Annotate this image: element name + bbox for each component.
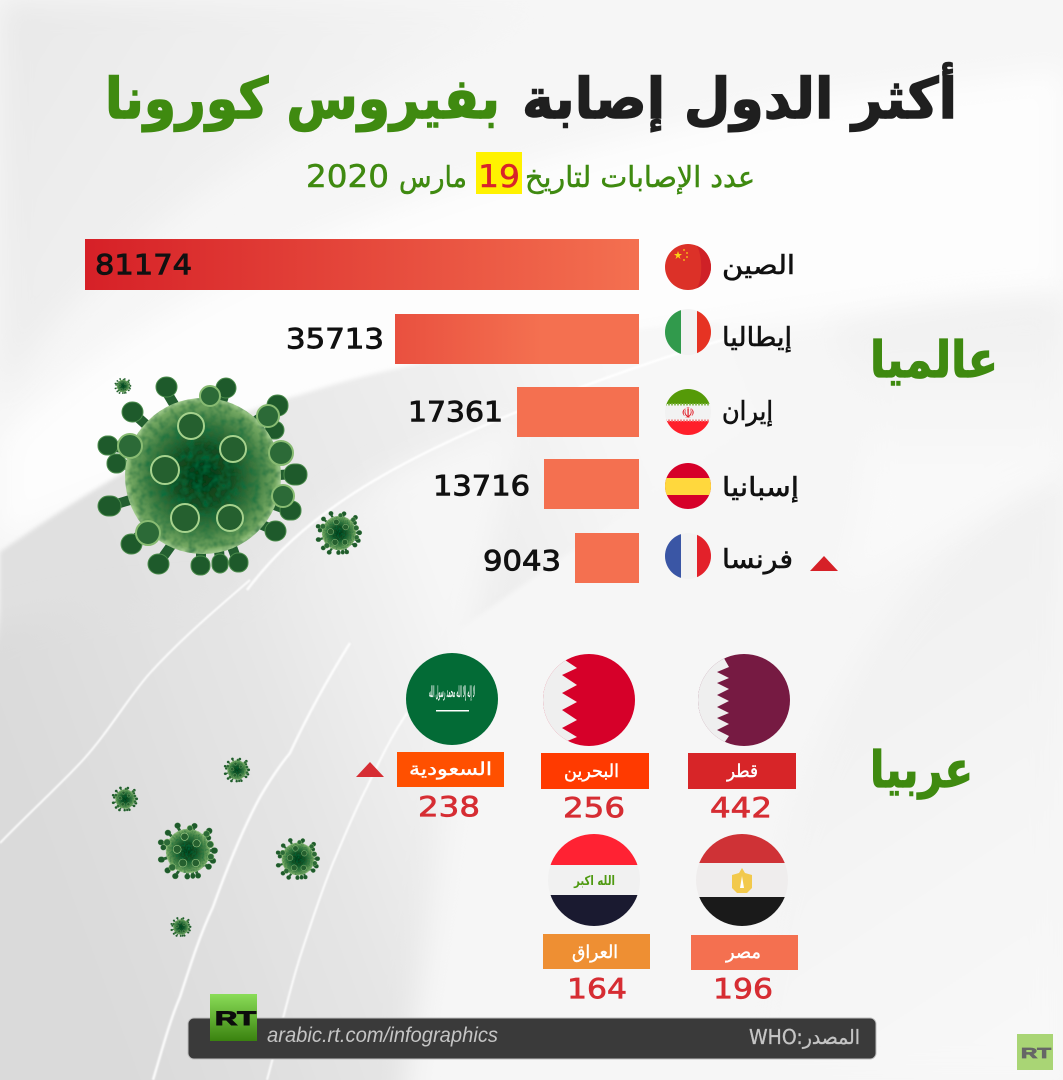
bar: Italy	[286, 314, 639, 364]
country names: global: فرنسا	[722, 545, 793, 575]
marker: France	[810, 556, 838, 571]
virus large	[98, 377, 307, 575]
virus small 1	[115, 378, 131, 394]
bar: Iran	[408, 387, 639, 437]
subtitle: 2020	[306, 159, 389, 195]
bar: China: 81174	[95, 248, 192, 281]
footer bar: WHO:المصدر	[749, 1025, 860, 1049]
virus small 4	[112, 787, 138, 811]
bar: Spain	[433, 459, 639, 509]
logo: RT: RT	[215, 1009, 257, 1030]
section label: global: عالميا	[870, 331, 998, 389]
infographic: لا إله إلا الله محمد رسول الله	[429, 683, 475, 701]
subtitle	[306, 152, 755, 195]
flag: Italy	[665, 309, 712, 355]
flag: Spain	[665, 463, 711, 509]
logo: RT watermark: RT	[1021, 1045, 1051, 1062]
card: Qatar	[688, 654, 796, 824]
virus small 2	[316, 511, 362, 555]
title: بفيروس كورونا	[105, 67, 500, 132]
subtitle: عدد الإصابات لتاريخ	[525, 160, 755, 195]
country names: global: إيطاليا	[722, 323, 792, 353]
card: Qatar: 442	[710, 791, 772, 824]
country names: global: إيران	[722, 397, 773, 427]
card: Bahrain: 256	[563, 791, 625, 824]
subtitle: مارس	[399, 160, 467, 194]
flag: Iran	[665, 389, 711, 435]
logo: RT watermark	[1017, 1034, 1053, 1070]
flag: Iran: ☫	[681, 404, 695, 422]
bar chart: global	[85, 239, 639, 583]
footer bar	[188, 1018, 876, 1059]
virus small 3	[224, 758, 250, 782]
subtitle: 19	[478, 159, 520, 195]
country names: global	[722, 251, 799, 575]
bar: Italy: 35713	[286, 322, 384, 355]
card: Egypt: 196	[713, 972, 773, 1005]
title	[105, 62, 957, 132]
title: أكثر الدول إصابة	[522, 62, 957, 132]
card: Egypt	[691, 834, 798, 1005]
virus small 7	[170, 917, 191, 937]
bar: Iran: 17361	[408, 395, 503, 428]
country names: global: إسبانيا	[722, 473, 799, 503]
card: Bahrain	[541, 654, 649, 824]
footer bar: arabic.rt.com/infographics	[267, 1024, 498, 1047]
card: Saudi Arabia	[397, 653, 504, 823]
flag: China	[665, 244, 711, 290]
country names: global: الصين	[722, 251, 795, 281]
card: Egypt: مصر	[725, 942, 761, 963]
flag: France	[665, 533, 712, 579]
bar: France: 9043	[483, 544, 561, 577]
card: Qatar: قطر	[726, 761, 758, 782]
card: Saudi Arabia: 238	[418, 790, 480, 823]
card: Iraq: العراق	[572, 942, 618, 963]
virus small 5	[158, 823, 218, 879]
card: Iraq: الله اكبر	[573, 874, 615, 889]
card: Bahrain: البحرين	[564, 761, 619, 782]
virus small 6	[276, 838, 320, 880]
card: Iraq: 164	[567, 972, 627, 1005]
marker: Saudi Arabia	[356, 762, 384, 777]
card: Iraq	[543, 834, 650, 1005]
logo: RT	[210, 994, 257, 1041]
bar: France	[483, 533, 639, 583]
card: Saudi Arabia: السعودية	[409, 759, 492, 780]
bar: China	[85, 239, 639, 290]
bar: Spain: 13716	[433, 469, 530, 502]
section label: Arab: عربيا	[870, 741, 973, 800]
